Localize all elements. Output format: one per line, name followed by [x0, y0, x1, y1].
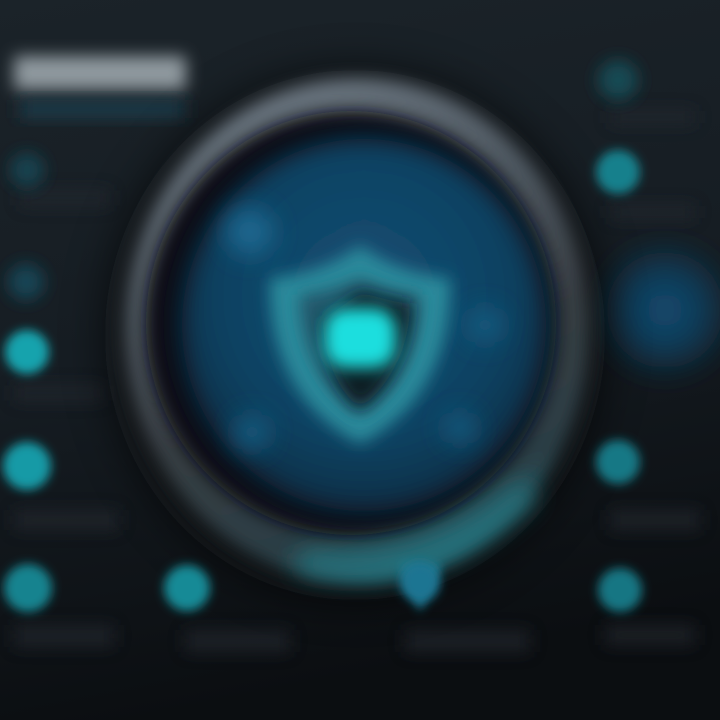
- bottom teal ring highlight: [300, 490, 530, 567]
- dot left 5: [4, 564, 52, 612]
- shield inner dark: [322, 292, 410, 408]
- dot bottom 2: [164, 565, 210, 611]
- dot left 4: [3, 442, 51, 490]
- shield core: [324, 308, 396, 368]
- inner dark ring: [146, 111, 556, 535]
- blue disc: [182, 139, 546, 511]
- shield mid: [300, 278, 420, 415]
- dot right 1: [598, 60, 638, 100]
- shield: [270, 245, 450, 444]
- side glow: [593, 238, 720, 382]
- heading block: [14, 56, 186, 118]
- dot bottom 3: [400, 562, 440, 602]
- bottom pointer: [398, 562, 442, 612]
- outer ring: [125, 78, 589, 582]
- dot right 2: [596, 150, 640, 194]
- dot right 3: [596, 440, 640, 484]
- status dots: [3, 60, 642, 612]
- text placeholders: left and right columns: [14, 110, 700, 652]
- dot left 3: [5, 330, 49, 374]
- dot left 2: [8, 264, 44, 300]
- dial shadow: [105, 70, 605, 600]
- dot left 1: [10, 153, 44, 187]
- disc specks: [226, 208, 503, 450]
- dot right 4: [598, 568, 642, 612]
- shield outer: [270, 245, 450, 444]
- main dial: [105, 70, 605, 612]
